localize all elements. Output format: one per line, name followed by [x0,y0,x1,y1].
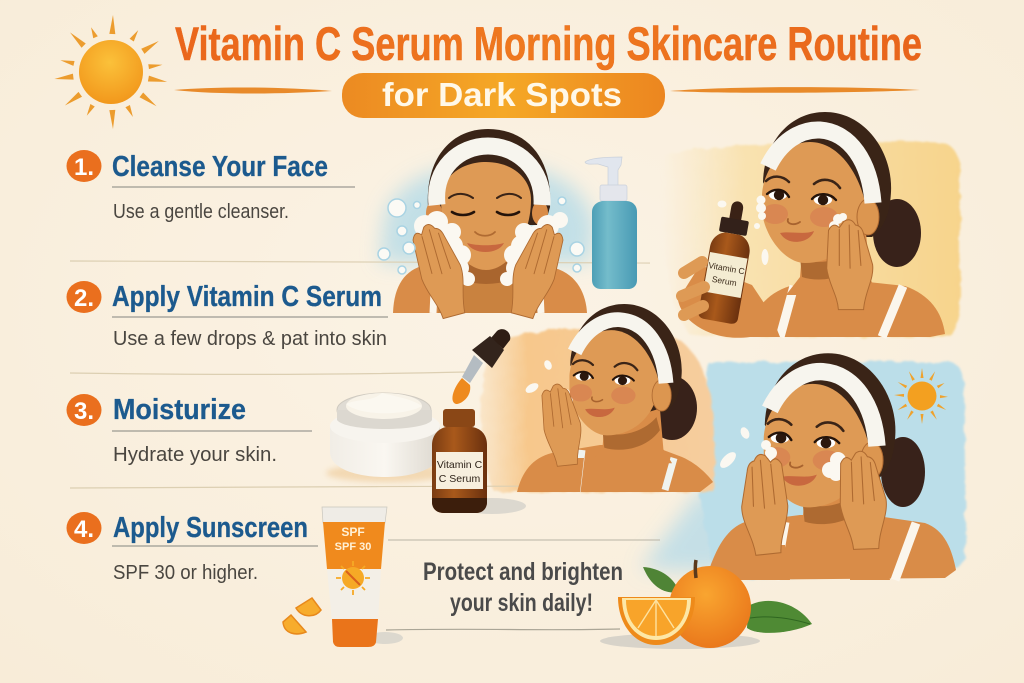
straps [775,522,916,580]
icon: serum bottle: Vitamin C [437,459,483,471]
number badge 4 [66,512,102,544]
right hand [503,219,567,321]
facial features [449,194,521,252]
divider near closing [388,539,660,541]
right hand [838,450,888,550]
icon: serum bottle [432,409,526,514]
number badge 3 [66,394,102,426]
subtitle banner: for Dark Spots [382,76,622,113]
step 2 [66,281,388,350]
heading 3: Moisturize [113,394,246,426]
woman 3 [517,304,713,492]
number badge 1 [66,150,102,182]
underline 1 [112,186,355,188]
text 2: Use a few drops & pat into skin [113,328,387,350]
right foam [822,452,856,481]
icon: pump bottle [585,157,637,289]
step 1 [66,150,355,223]
number badge 1: 1. [74,154,94,181]
number badge 4: 4. [74,516,94,543]
forearm [829,305,865,337]
closing message [423,558,623,617]
forearm [556,458,584,492]
number badge 3: 3. [74,398,94,425]
holding fingers [682,262,704,315]
panel: step 3 watercolor [481,329,714,492]
icon: serum bottle: C Serum [439,473,480,485]
bun [873,199,921,267]
woman 4 [710,353,956,580]
head [569,304,682,463]
hand on cheek [827,220,873,310]
head [762,112,891,295]
forearms [740,540,890,580]
left hand [736,452,793,556]
straps [780,286,903,337]
icon: sun [54,15,168,129]
icon: sunscreen tube [322,507,403,647]
ears [426,201,548,225]
panel: step 1 watercolor [380,165,595,263]
heading 4: Apply Sunscreen [113,512,308,544]
serum bottle [697,198,758,325]
icon: orange slices [283,598,321,634]
panel: step 2 watercolor [662,141,960,337]
bun [881,437,925,507]
text 1: Use a gentle cleanser. [113,201,289,223]
chin shadow [452,256,520,284]
decorative brush left [174,87,332,94]
straps [433,292,541,313]
decorative brush right [670,87,920,93]
bun [647,376,697,440]
face [441,162,531,270]
closing message: your skin daily! [450,589,593,617]
text 4: SPF 30 or higher. [113,562,258,584]
serum bottle: Vitamin C [708,260,746,276]
shoulders [748,280,945,337]
foam on cheek [718,196,847,265]
shoulders [517,445,713,492]
icon: dropper [452,329,510,404]
step 3 [66,394,312,466]
text 3: Hydrate your skin. [113,444,277,466]
straps [577,450,674,492]
step 4 [66,512,318,584]
number badge 2 [66,281,102,313]
icon: cream jar [326,393,450,482]
hand [539,382,585,467]
underline 2 [112,316,388,318]
icon: oranges and leaves [600,560,812,649]
underline 4 [112,545,318,547]
panel: step 4 watercolor [700,362,966,580]
hair back [428,129,550,225]
bubbles [378,197,584,274]
serum bottle: Serum [711,274,738,288]
heading 2: Apply Vitamin C Serum [112,281,382,313]
holding palm [678,265,780,338]
head [764,353,895,540]
number badge 2: 2. [74,285,94,312]
foam right [500,212,568,286]
shoulders [710,515,956,580]
foam [524,359,573,413]
foam left [414,211,475,286]
left hand [409,219,473,321]
subtitle banner [342,73,665,118]
underline 3 [112,430,312,432]
panel: step 4 watercolor fade [640,490,730,572]
headband [437,146,542,205]
shoulders [393,258,587,313]
icon: sunscreen tube: SPF [341,525,365,539]
icon: small sun [894,368,948,424]
chest and neck [438,250,538,313]
left foam [717,426,777,479]
icon: sunscreen tube: SPF 30 [335,541,371,553]
woman 1 cleansing [378,129,587,321]
heading 1: Cleanse Your Face [112,151,328,183]
woman 2 with serum [678,112,945,338]
closing message: Protect and brighten [423,558,623,586]
